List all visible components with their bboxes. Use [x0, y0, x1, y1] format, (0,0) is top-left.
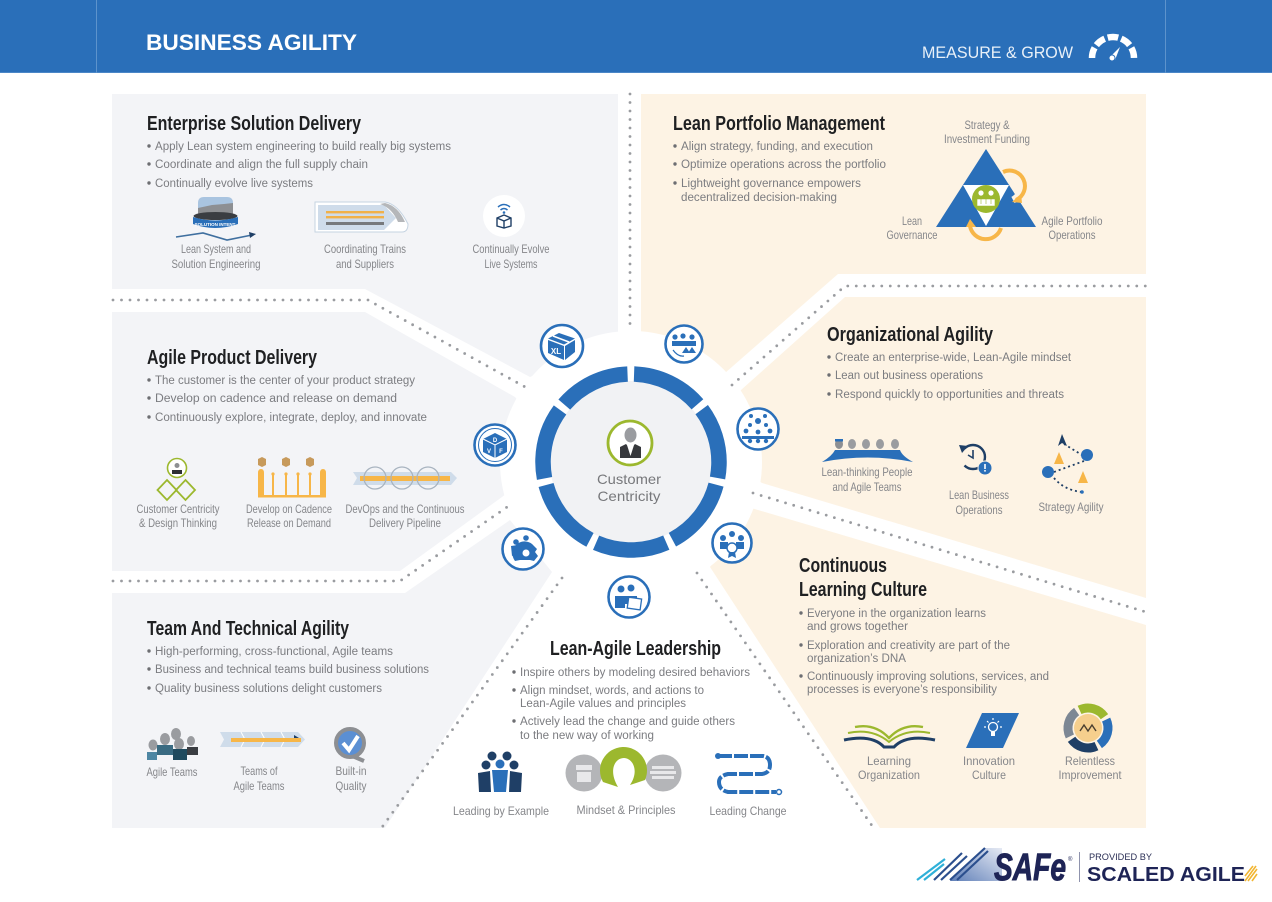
icon: strategy agility	[1042, 434, 1093, 494]
bullet list: Optimize operations across the portfolio	[681, 159, 886, 171]
label: Lean System and	[181, 242, 251, 256]
title: BUSINESS AGILITY	[146, 30, 357, 55]
label: Lean-thinking People	[822, 465, 913, 479]
label: and Suppliers	[336, 257, 394, 271]
label	[822, 465, 913, 494]
heading: Lean Portfolio Management	[673, 113, 885, 135]
icon: built-in quality	[336, 729, 364, 761]
bullet list	[512, 667, 750, 742]
registered mark: ®	[1068, 856, 1073, 863]
bullet list: Inspire others by modeling desired behaviors	[520, 667, 750, 679]
bullet list: Lightweight governance empowers	[681, 178, 861, 190]
label: Customer Centricity	[136, 502, 220, 516]
label: Improvement	[1058, 768, 1122, 782]
label	[136, 502, 220, 530]
heading: Team And Technical Agility	[147, 618, 350, 640]
label: Investment Funding	[944, 132, 1030, 146]
icon: leading by example	[478, 752, 522, 792]
icon: lean business operations	[959, 445, 992, 475]
label: Operations	[956, 503, 1002, 517]
icon: leading change	[715, 753, 782, 794]
label: Continually Evolve	[472, 242, 550, 256]
bullet list: Align mindset, words, and actions to	[520, 685, 704, 697]
panel: Enterprise Solution Delivery	[112, 94, 618, 377]
label: Quality	[336, 779, 366, 793]
label	[472, 242, 550, 271]
bullet list: Create an enterprise-wide, Lean-Agile mindset	[835, 352, 1072, 364]
label: Leading Change	[710, 804, 787, 818]
bullet list: Align strategy, funding, and execution	[681, 141, 873, 153]
panel: Agile Product Delivery	[112, 312, 560, 571]
segmented blue ring	[540, 371, 722, 553]
logo mountain mark	[917, 848, 1002, 881]
label: Lean	[902, 214, 922, 228]
label	[336, 764, 366, 793]
SAFe wordmark: SAFe	[994, 847, 1066, 889]
icon: lean-thinking people	[822, 439, 913, 462]
panel: Lean Portfolio Management	[641, 94, 1146, 373]
icon: portfolio	[666, 326, 702, 362]
label	[963, 754, 1015, 782]
measure and grow label: MEASURE & GROW	[922, 43, 1073, 62]
panel: Lean-Agile Leadership	[453, 638, 787, 818]
bullet list: Develop on cadence and release on demand	[155, 393, 397, 405]
icon: mindset and principles	[566, 747, 682, 792]
label: Solution Engineering	[172, 257, 260, 271]
bullet list: Quality business solutions delight customers	[155, 683, 382, 695]
dotted dividers	[113, 94, 1146, 830]
icon: train	[315, 202, 408, 232]
icon: portfolio triangle	[936, 149, 1036, 244]
bullet list: Lean-Agile values and principles	[520, 698, 686, 710]
scaled agile: SCALED AGILE	[1087, 864, 1245, 886]
label: Coordinating Trains	[324, 242, 406, 256]
icon: teams of agile teams	[220, 732, 305, 747]
label: Operations	[1048, 228, 1096, 242]
label: Delivery Pipeline	[369, 516, 441, 530]
label	[324, 242, 406, 271]
bullet list: processes is everyone’s responsibility	[807, 684, 997, 696]
label	[858, 754, 920, 782]
label: Release on Demand	[247, 516, 331, 530]
icon: solution intent	[176, 197, 256, 240]
label: Agile Teams	[234, 779, 284, 793]
bullet list	[147, 375, 427, 424]
label: Lean Business	[949, 488, 1009, 502]
hub: customer centricity	[500, 331, 762, 593]
icon: wifi box	[483, 195, 525, 237]
icon: leadership	[608, 576, 650, 618]
bullet list: Apply Lean system engineering to build really big systems	[155, 141, 451, 153]
heading: Lean-Agile Leadership	[550, 638, 721, 660]
icon: customer	[608, 421, 652, 465]
label: Culture	[972, 768, 1006, 782]
logo gold mark	[1245, 866, 1257, 881]
label	[246, 502, 332, 530]
bullet list: Continually evolve live systems	[155, 178, 313, 190]
icon: relentless improvement	[1061, 701, 1115, 755]
label: & Design Thinking	[139, 516, 217, 530]
label: Relentless	[1065, 754, 1115, 768]
bullet list: Lean out business operations	[835, 370, 983, 382]
label: Live Systems	[484, 257, 538, 271]
label	[234, 764, 284, 793]
bullet list	[147, 646, 429, 695]
icon: technical gear	[502, 528, 544, 570]
label: Organization	[858, 768, 920, 782]
bullet list: Exploration and creativity are part of the	[807, 640, 1010, 652]
bullet list: to the new way of working	[520, 730, 654, 742]
icon: DVF cube: V	[487, 449, 491, 455]
icon: DVF cube: D	[493, 438, 498, 444]
hub label: Customer	[597, 471, 661, 487]
logo: SAFe provided by Scaled Agile	[917, 847, 1257, 889]
label: and Agile Teams	[832, 480, 902, 494]
bullet list	[673, 141, 886, 204]
heading: Agile Product Delivery	[147, 347, 318, 369]
label: Agile Teams	[146, 765, 198, 779]
label: Learning	[867, 754, 911, 768]
bullet list: The customer is the center of your product strategy	[155, 375, 415, 387]
icon: learning culture team	[712, 524, 752, 562]
label	[172, 242, 260, 271]
bullet list: and grows together	[807, 621, 908, 633]
icon: DVF cube: F	[499, 449, 503, 455]
panel: Continuous Learning Culture	[710, 507, 1146, 828]
bullet list: Continuously explore, integrate, deploy, and innovate	[155, 412, 427, 424]
panel: Team And Technical Agility	[112, 520, 552, 828]
icon: gauge	[1092, 37, 1134, 61]
label: Leading by Example	[453, 804, 549, 818]
icon: DVF cube	[474, 424, 516, 466]
label	[346, 502, 464, 530]
label	[1058, 754, 1122, 782]
label: Built-in	[336, 764, 366, 778]
hub label: Centricity	[598, 488, 660, 504]
label: Teams of	[240, 764, 278, 778]
bullet list	[799, 608, 1049, 696]
icon: open book	[844, 726, 935, 747]
label: Develop on Cadence	[246, 502, 332, 516]
heading: Continuous	[799, 555, 887, 577]
icon: solution XL box	[541, 325, 583, 367]
bullet list	[147, 141, 451, 190]
icon: customer centricity and design thinking	[158, 458, 195, 500]
heading	[799, 555, 927, 601]
label	[1042, 214, 1103, 242]
label	[886, 214, 938, 242]
label: Strategy Agility	[1038, 500, 1104, 514]
provided by: PROVIDED BY	[1089, 852, 1153, 863]
icon: solution XL box: XL	[551, 347, 561, 356]
icon: cadence and release	[258, 457, 326, 498]
label: Strategy &	[964, 118, 1010, 132]
heading: Learning Culture	[799, 579, 927, 601]
panel: Organizational Agility	[700, 297, 1146, 598]
icon: DevOps pipeline	[353, 467, 457, 489]
bullet list: Respond quickly to opportunities and threats	[835, 389, 1064, 401]
heading: Organizational Agility	[827, 324, 994, 346]
hub label	[597, 471, 661, 504]
label: Agile Portfolio	[1042, 214, 1103, 228]
bullet list: High-performing, cross-functional, Agile teams	[155, 646, 393, 658]
divider	[1079, 852, 1080, 882]
bullet list: Actively lead the change and guide others	[520, 716, 735, 728]
bullet list	[827, 352, 1072, 401]
label: Mindset & Principles	[576, 803, 676, 817]
bullet list: Business and technical teams build business solutions	[155, 664, 429, 676]
icon: solution intent: SOLUTION INTENT	[195, 222, 236, 227]
bullet list: Continuously improving solutions, services, and	[807, 671, 1049, 683]
label	[949, 488, 1009, 517]
label: Innovation	[963, 754, 1015, 768]
bullet list: Coordinate and align the full supply chain	[155, 159, 368, 171]
bullet list: organization’s DNA	[807, 653, 906, 665]
heading: Enterprise Solution Delivery	[147, 113, 362, 135]
label: Governance	[886, 228, 938, 242]
icon: organization tree	[738, 408, 778, 450]
icon: agile teams	[147, 728, 198, 760]
icon: innovation culture	[966, 713, 1019, 748]
bullet list: decentralized decision-making	[681, 192, 837, 204]
header banner	[0, 0, 1272, 73]
bullet list: Everyone in the organization learns	[807, 608, 986, 620]
label	[944, 118, 1030, 146]
label: DevOps and the Continuous	[346, 502, 464, 516]
